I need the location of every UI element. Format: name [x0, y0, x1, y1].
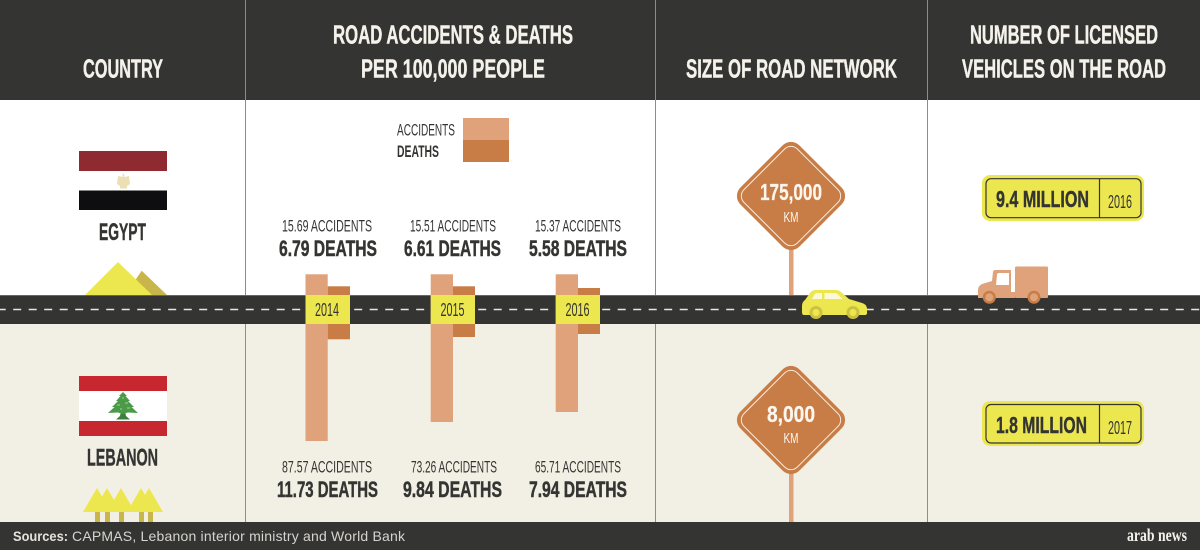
road — [0, 295, 1200, 324]
legend: DEATHS — [397, 142, 439, 161]
Egypt 2016 figures: 5.58 DEATHS — [529, 236, 627, 261]
Lebanon 2016 figures — [529, 458, 627, 502]
Egypt 2014 figures: 15.69 ACCIDENTS — [282, 216, 372, 236]
Egypt 2014 figures — [279, 216, 377, 261]
Egypt 2014 figures: 6.79 DEATHS — [279, 236, 377, 261]
licence plate: Egypt — [982, 175, 1144, 221]
flag: Egypt — [79, 151, 167, 210]
Lebanon 2014 figures: 11.73 DEATHS — [277, 477, 378, 502]
bar chart: 2016: 2016 — [566, 300, 590, 320]
road sign: Lebanon network: KM — [784, 430, 798, 447]
Lebanon 2015 figures: 9.84 DEATHS — [403, 477, 502, 502]
heading: licensed vehicles — [962, 20, 1166, 84]
sources text: Sources: — [13, 528, 68, 544]
heading: road accidents and deaths — [333, 20, 573, 84]
Lebanon 2015 figures: 73.26 ACCIDENTS — [411, 458, 497, 476]
heading: country: COUNTRY — [83, 54, 163, 84]
licence plate: Lebanon — [982, 401, 1144, 446]
Egypt 2015 figures — [404, 216, 501, 261]
Egypt 2015 figures: 6.61 DEATHS — [404, 236, 501, 261]
footer bar — [0, 522, 1200, 550]
licence plate: Egypt: 9.4 MILLION — [996, 186, 1089, 212]
legend — [397, 118, 509, 162]
icon: eagle — [117, 173, 130, 188]
Egypt 2015 figures: 15.51 ACCIDENTS — [410, 216, 496, 236]
flag: Lebanon — [79, 376, 167, 436]
road sign: Egypt network — [732, 137, 850, 295]
header bar — [0, 0, 1200, 100]
road sign: Lebanon network — [732, 361, 850, 522]
bar chart: 2014: 2014 — [315, 300, 339, 320]
icon: car — [802, 290, 867, 319]
bar chart: 2016 — [556, 274, 600, 412]
road sign: Lebanon network: 8,000 — [767, 401, 815, 427]
bar chart: 2015: 2015 — [440, 300, 464, 320]
road sign: Egypt network: 175,000 — [760, 179, 822, 205]
heading: road accidents and deaths: ROAD ACCIDENTS & DEATHS — [333, 20, 573, 50]
illustration: pyramids — [85, 262, 167, 295]
icon: truck — [978, 266, 1048, 304]
sources text: CAPMAS, Lebanon interior ministry and World Bank — [72, 528, 406, 544]
Lebanon 2014 figures: 87.57 ACCIDENTS — [282, 458, 372, 476]
heading: size of road network: SIZE OF ROAD NETWORK — [686, 54, 897, 84]
heading: road accidents and deaths: PER 100,000 PEOPLE — [361, 54, 545, 84]
licence plate: Egypt: 2016 — [1108, 192, 1132, 212]
icon: cedar — [108, 392, 138, 420]
label: Egypt: EGYPT — [99, 219, 146, 246]
road sign: Egypt network: KM — [784, 209, 798, 226]
Lebanon 2016 figures: 65.71 ACCIDENTS — [535, 458, 621, 476]
licence plate: Lebanon: 2017 — [1108, 418, 1132, 438]
bar chart: 2015 — [431, 274, 475, 422]
bar chart: 2014 — [306, 274, 350, 441]
illustration: cedar trees — [83, 488, 163, 522]
licence plate: Lebanon: 1.8 MILLION — [996, 412, 1087, 438]
Egypt 2016 figures — [529, 216, 627, 261]
legend: ACCIDENTS — [397, 120, 455, 140]
Lebanon 2015 figures — [403, 458, 502, 502]
Lebanon 2014 figures — [277, 458, 378, 502]
label: Lebanon: LEBANON — [87, 444, 158, 472]
Lebanon 2016 figures: 7.94 DEATHS — [529, 477, 627, 502]
Egypt 2016 figures: 15.37 ACCIDENTS — [535, 216, 621, 236]
